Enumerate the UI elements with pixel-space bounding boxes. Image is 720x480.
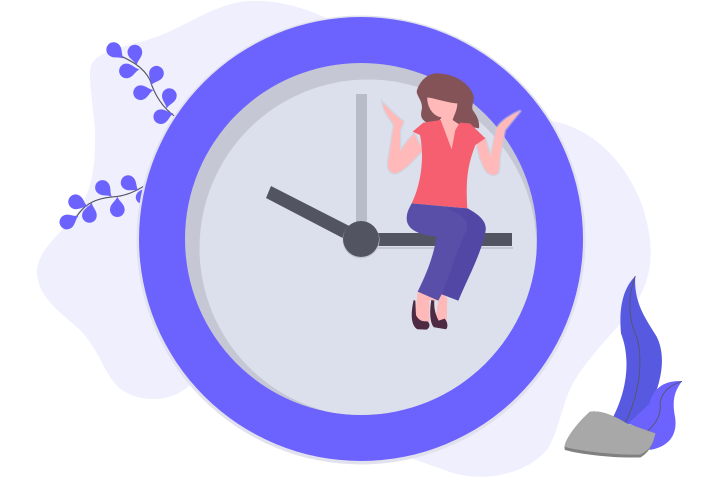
clock shadow rim: [136, 16, 586, 464]
clock outer ring: [139, 17, 583, 461]
woman: shirt: [412, 120, 485, 208]
plant: tall leaf: [613, 276, 662, 427]
hour hand vertical: [356, 94, 367, 240]
rock: [565, 411, 655, 457]
woman: trousers: [407, 203, 486, 301]
clock dial shadow: [185, 63, 537, 415]
plant and rock: [565, 276, 682, 457]
minute hand: [266, 186, 365, 246]
vine: upper branch: [103, 39, 178, 126]
woman: right shoe: [430, 300, 447, 329]
plant: small leaf: [628, 381, 682, 450]
woman: [383, 73, 521, 330]
woman: feet: [415, 292, 447, 323]
woman: left shoe: [412, 300, 429, 330]
hand shadow: [366, 247, 513, 249]
horizontal hand: [361, 233, 512, 246]
woman: far leg shade: [442, 208, 486, 301]
woman: hair: [417, 73, 479, 128]
vine: lower branch: [57, 172, 153, 232]
clock centre: [342, 222, 380, 258]
clock dial face: [200, 80, 536, 416]
woman: left arm: [383, 103, 423, 173]
vines: [57, 39, 178, 232]
clock: [136, 16, 586, 464]
woman: face and neck: [427, 97, 460, 152]
woman: right arm: [476, 111, 521, 175]
